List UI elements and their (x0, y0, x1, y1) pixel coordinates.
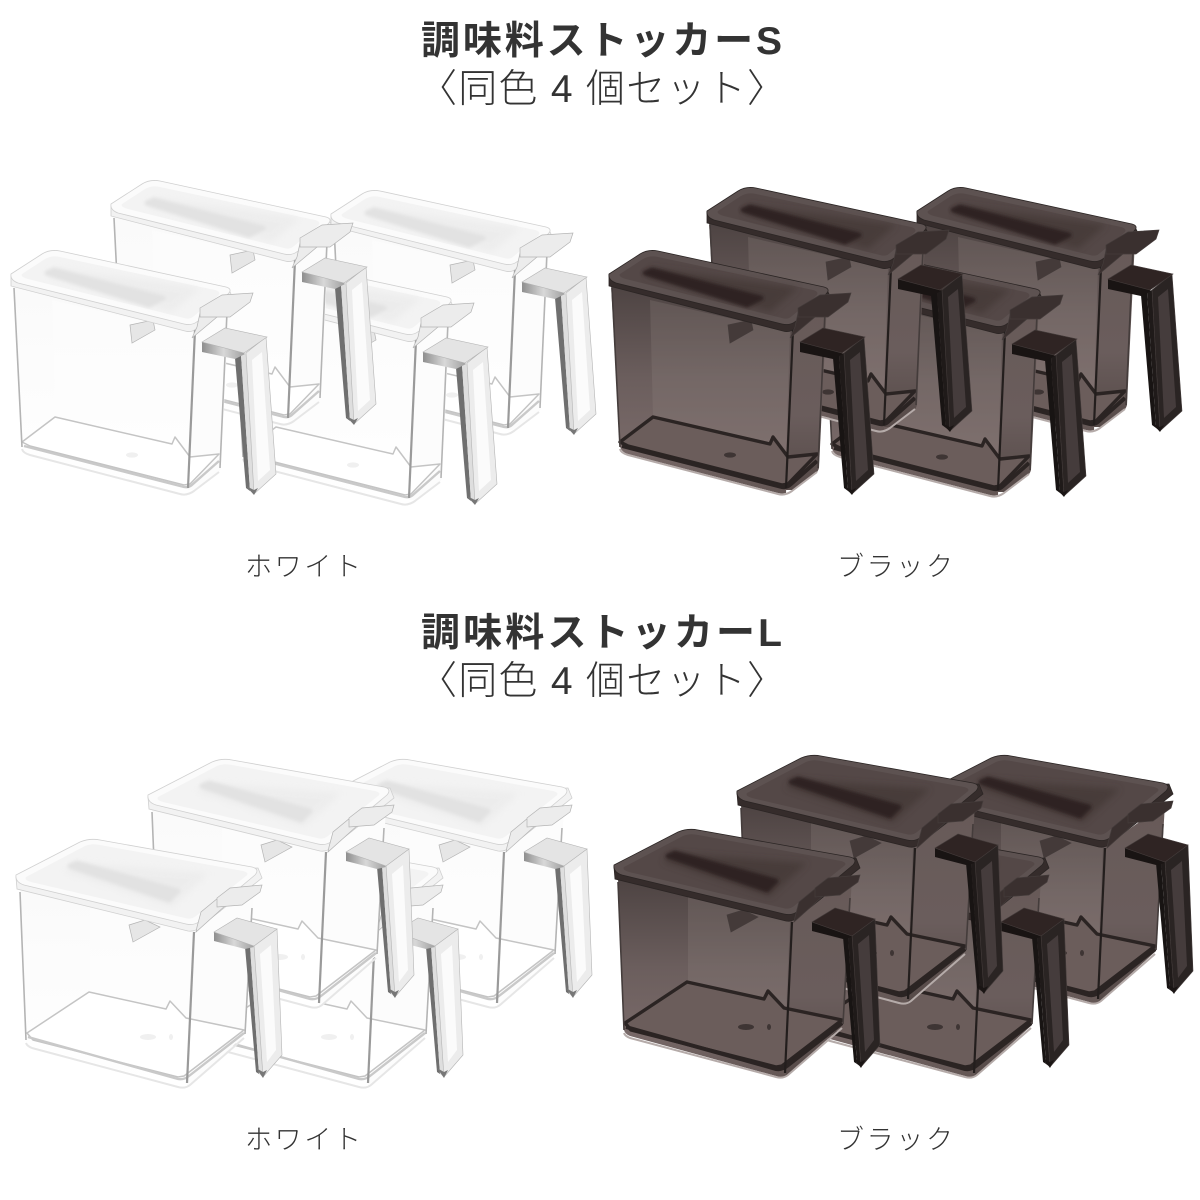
title: stocker S (418, 20, 786, 111)
title: stocker S: 調味料ストッカーS (421, 20, 782, 63)
panel: stocker S black set (609, 187, 1182, 497)
container: back right (326, 759, 592, 1008)
title: stocker S: 〈同色 4 個セット〉 (418, 68, 786, 111)
container: front left (614, 829, 880, 1078)
panel: stocker S white set (11, 180, 596, 505)
title: stocker L: 調味料ストッカーL (421, 612, 782, 655)
container: back left (111, 180, 376, 425)
title: stocker L: 〈同色 4 個セット〉 (418, 660, 786, 703)
label: L white: ホワイト (245, 1125, 361, 1155)
container: front right (821, 252, 1086, 497)
label: S black: ブラック (837, 552, 953, 582)
container: front left (609, 250, 874, 495)
container: back left (737, 755, 1003, 1004)
container: front right (232, 260, 497, 505)
container: back left (148, 759, 414, 1008)
container: back right (927, 755, 1193, 1004)
label: L black: ブラック (837, 1125, 953, 1155)
label: S white: ホワイト (245, 552, 361, 582)
panel: stocker L white set (16, 759, 592, 1088)
container: back right (917, 187, 1182, 432)
container: back left (707, 187, 972, 432)
container: front right (197, 839, 463, 1088)
container: front right (803, 829, 1069, 1078)
container: front left (16, 839, 282, 1088)
panel: stocker L black set (614, 755, 1193, 1078)
container: back right (331, 190, 596, 435)
title: stocker L (418, 612, 786, 703)
container: front left (11, 250, 276, 495)
